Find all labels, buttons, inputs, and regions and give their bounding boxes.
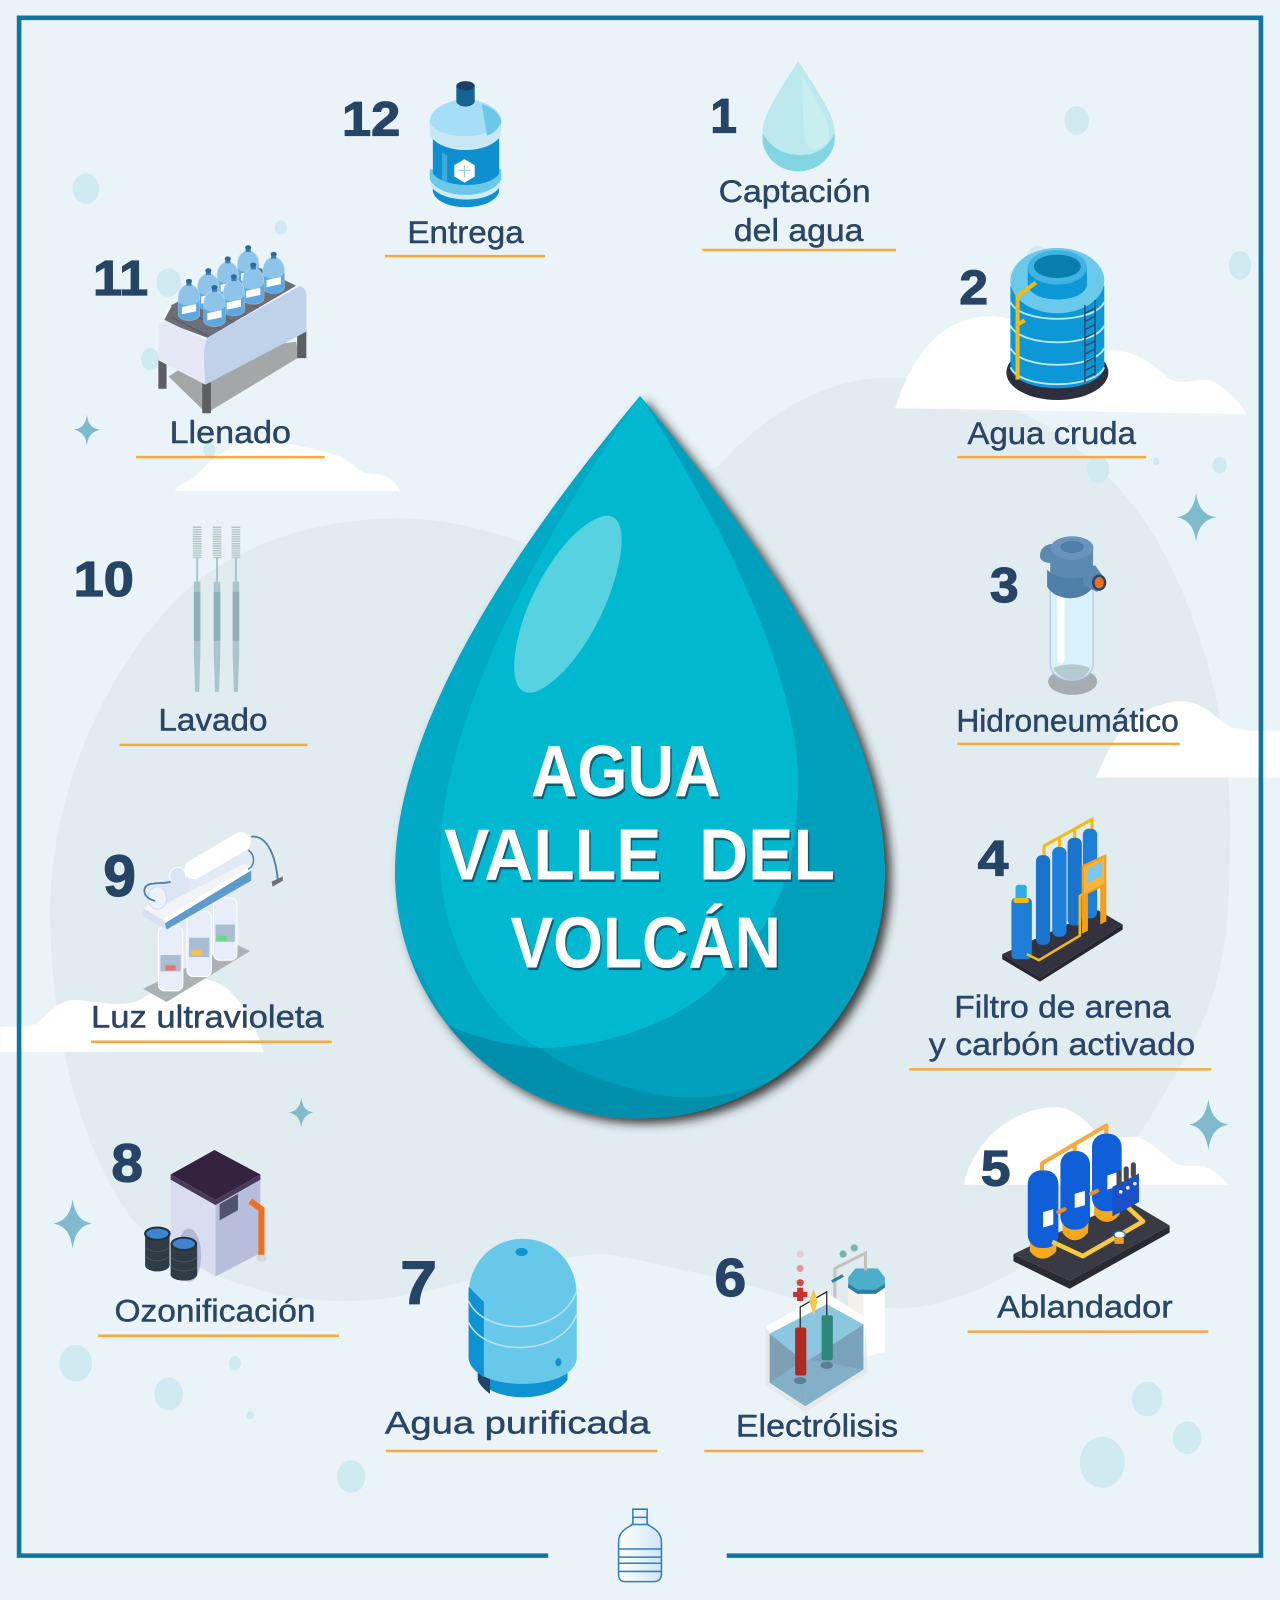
icon: sand and carbon filter <box>1002 819 1123 982</box>
clouds <box>0 316 1280 1185</box>
icon: footer water jug <box>619 1509 661 1582</box>
step 8: Ozonificación <box>98 1134 339 1336</box>
label Ozonificación: Ozonificación <box>114 1292 316 1328</box>
icon: water drop <box>762 61 835 171</box>
icon: water jug <box>430 81 501 207</box>
number 8: 8 <box>111 1134 143 1194</box>
drop body <box>395 396 885 1118</box>
step 6: Electrólisis <box>704 1244 924 1451</box>
label Ablandador: Ablandador <box>997 1288 1173 1324</box>
icon: UV filter unit <box>143 837 283 1002</box>
step 7: Agua purificada <box>385 1239 657 1451</box>
step 3: Hidroneumático <box>956 536 1180 744</box>
number 3: 3 <box>990 559 1019 613</box>
number 11: 11 <box>93 252 148 306</box>
number 4: 4 <box>978 831 1009 887</box>
number 1: 1 <box>710 91 737 144</box>
drop highlight <box>514 516 622 693</box>
label Captación del agua: del agua <box>734 212 864 248</box>
icon: water tank <box>1006 248 1108 400</box>
label Llenado: Llenado <box>170 414 291 450</box>
number 10: 10 <box>74 553 134 607</box>
step 10: Lavado <box>74 527 307 745</box>
step 11: Llenado <box>93 245 325 457</box>
label Agua purificada: Agua purificada <box>385 1405 651 1441</box>
icon: pressure tank <box>469 1239 577 1397</box>
label Agua cruda: Agua cruda <box>968 415 1136 451</box>
main title: AGUA <box>531 731 721 812</box>
label Filtro de arena y carbón activado: y carbón activado <box>929 1026 1195 1062</box>
label Electrólisis: Electrólisis <box>736 1408 898 1444</box>
step 4: Filtro de arena y carbón activado <box>909 819 1211 1069</box>
central water drop <box>388 396 885 1133</box>
icon: bottle filling table <box>158 245 306 413</box>
icon: softener tanks <box>1013 1126 1170 1289</box>
icon: electrolysis tank <box>766 1244 885 1412</box>
drop shading layers <box>388 396 817 1133</box>
number 6: 6 <box>714 1248 746 1308</box>
icon: filter housing <box>1040 536 1106 695</box>
label Hidroneumático: Hidroneumático <box>956 703 1179 739</box>
number 5: 5 <box>981 1141 1010 1197</box>
label Luz ultravioleta: Luz ultravioleta <box>91 999 324 1035</box>
main title <box>444 731 835 983</box>
label Captación del agua <box>719 173 871 248</box>
step 12: Entrega <box>342 81 545 256</box>
label Filtro de arena y carbón activado: Filtro de arena <box>954 988 1171 1024</box>
main title: VOLCÁN <box>510 902 781 983</box>
step 1: Captación del agua <box>702 61 896 250</box>
label Lavado: Lavado <box>158 702 268 738</box>
step 2: Agua cruda <box>957 248 1146 457</box>
number 7: 7 <box>400 1249 437 1317</box>
icon: cleaning brushes <box>194 527 239 692</box>
main title: VALLE DEL <box>444 815 835 896</box>
sparkle stars <box>53 414 1229 1249</box>
label Captación del agua: Captación <box>719 173 871 209</box>
step 5: Ablandador <box>968 1126 1208 1332</box>
icon: ozone generator <box>145 1150 267 1282</box>
step 9: Luz ultravioleta <box>91 837 332 1042</box>
background hills <box>50 377 1230 1308</box>
number 9: 9 <box>103 844 136 909</box>
label Entrega: Entrega <box>407 214 524 250</box>
label Filtro de arena y carbón activado <box>929 988 1195 1062</box>
number 2: 2 <box>959 262 988 315</box>
number 12: 12 <box>342 94 400 147</box>
